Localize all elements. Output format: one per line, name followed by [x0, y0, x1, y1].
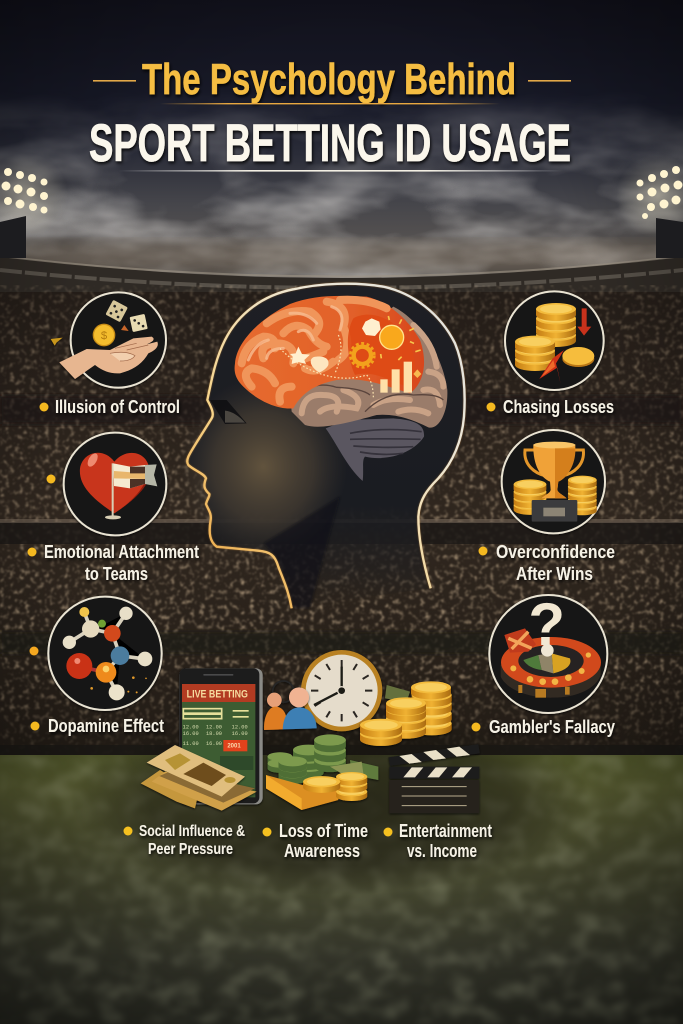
icon: clock [301, 650, 382, 731]
panel: illusion of control [40, 292, 180, 417]
panel: dopamine effect [30, 597, 164, 736]
title [89, 55, 571, 173]
icon: live betting phone: 2001 [227, 744, 241, 750]
title line one: The Psychology Behind [142, 55, 516, 104]
head shape [187, 284, 465, 608]
label dot [478, 546, 488, 556]
icon: cash and gold bars [266, 734, 378, 810]
face shading [180, 377, 347, 557]
label: social influence and peer pressure: Peer Pressure [148, 841, 233, 858]
label: dopamine effect: Dopamine Effect [48, 716, 164, 736]
icon: roulette and question mark: ? [528, 591, 565, 658]
label dot [28, 548, 36, 556]
icon: roulette and question mark [489, 591, 607, 713]
label: gambler's fallacy: Gambler's Fallacy [489, 717, 615, 737]
icon: trophy and coin stacks [502, 430, 605, 533]
head outline [187, 284, 465, 608]
decorative dot [46, 474, 56, 484]
label: social influence and peer pressure: Social Influence & [139, 823, 245, 840]
label: chasing losses: Chasing Losses [503, 397, 614, 417]
brain [235, 296, 447, 481]
label: loss of time awareness [279, 821, 368, 861]
floodlight left [0, 153, 68, 258]
lower lobe [291, 307, 447, 428]
label: overconfidence after wins: After Wins [516, 564, 593, 584]
icon: betting slips [141, 745, 257, 811]
icon: live betting phone [179, 668, 263, 804]
label dot [40, 402, 48, 412]
panel: gambler's fallacy [472, 591, 615, 737]
panel: chasing losses [486, 291, 614, 417]
icon: clapperboard [388, 744, 480, 813]
icon: live betting phone: 12.00 [206, 724, 222, 730]
icon: coins with red arrows [505, 291, 604, 390]
icon: live betting phone: 12.00 [232, 724, 248, 730]
label dot [30, 722, 40, 730]
label dot [472, 722, 480, 732]
label dot [124, 826, 132, 836]
panel: bottom illustration cluster [141, 650, 480, 813]
label: overconfidence after wins: Overconfidence [496, 542, 615, 562]
icon: heart and team flag [64, 433, 166, 535]
brain reward icons [280, 316, 421, 397]
panel: overconfidence [478, 430, 615, 584]
icon: live betting phone: 12.00 [183, 724, 199, 730]
label: emotional attachment to teams [44, 542, 199, 584]
gyri [242, 300, 387, 402]
central head silhouette with brain [180, 284, 465, 608]
icon: coin stacks [360, 681, 452, 746]
icon: dopamine molecule [48, 597, 162, 710]
icon: live betting phone: 11.00 [183, 741, 199, 747]
label: loss of time awareness: Loss of Time [279, 821, 368, 841]
icon: live betting phone: 16.00 [206, 741, 222, 747]
label: entertainment vs income [399, 821, 492, 861]
icon: hand with dice and coin: $ [101, 330, 108, 342]
label: emotional attachment to teams: Emotional Attachment [44, 542, 199, 562]
cerebellum [326, 418, 424, 481]
label: entertainment vs income: vs. Income [407, 841, 477, 861]
icon: people [264, 681, 317, 730]
label dot [262, 828, 272, 836]
label: overconfidence after wins [496, 542, 615, 584]
floodlight right [616, 154, 683, 258]
label: social influence and peer pressure [139, 823, 245, 858]
label: emotional attachment to teams: to Teams [85, 564, 148, 584]
panel: bottom labels [124, 821, 492, 861]
panel: emotional attachment [28, 433, 199, 584]
label dot [384, 828, 392, 836]
icon: live betting phone: 18.00 [206, 731, 222, 737]
label: entertainment vs income: Entertainment [399, 821, 492, 841]
decorative dot [30, 646, 38, 656]
label: illusion of control: Illusion of Control [55, 397, 180, 417]
icon: live betting phone: LIVE BETTING [187, 689, 248, 701]
icon: hand with dice and coin [51, 292, 166, 388]
label: loss of time awareness: Awareness [284, 841, 360, 861]
orange cortex [235, 296, 424, 409]
label dot [486, 402, 496, 412]
icon: live betting phone: 16.00 [183, 731, 199, 737]
icon: live betting phone: 16.00 [232, 731, 248, 737]
